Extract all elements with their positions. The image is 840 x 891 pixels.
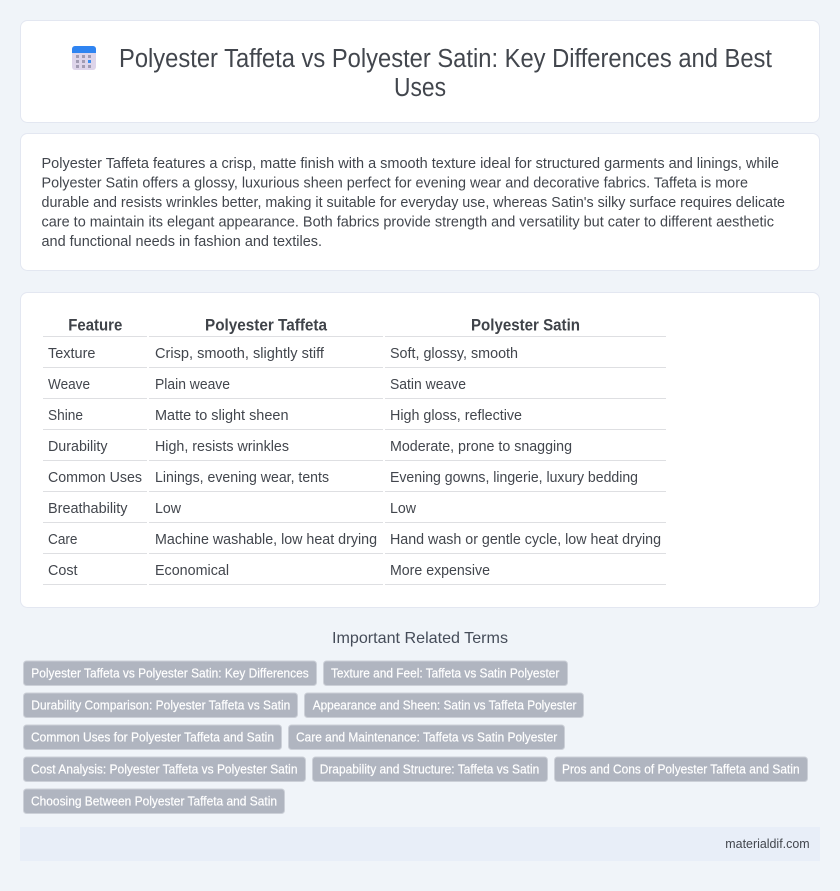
row: breathability: Low xyxy=(390,501,417,517)
row: weave: Satin weave xyxy=(390,377,466,393)
text block: overview: Polyester Taffeta features a crisp, matte finish with a smooth texture ideal for structured garments and linings, while xyxy=(42,156,779,172)
row: cost: More expensive xyxy=(390,563,490,579)
tag xyxy=(24,661,316,686)
tag: Care and Maintenance: Taffeta vs Satin Polyester xyxy=(296,730,557,744)
row: breathability xyxy=(48,501,417,517)
tag xyxy=(24,693,298,718)
title: Polyester Taffeta vs Polyester Satin: Key Differences and Best xyxy=(119,45,772,73)
footer: site name: materialdif.com xyxy=(725,836,810,851)
row: durability: Moderate, prone to snagging xyxy=(390,439,572,455)
row: care: Care xyxy=(48,532,78,548)
row: cost xyxy=(48,563,490,579)
row: care: Machine washable, low heat drying xyxy=(155,532,377,548)
row: shine: Shine xyxy=(48,408,83,424)
row: cost: Economical xyxy=(155,563,229,579)
text block: overview xyxy=(42,156,785,250)
title xyxy=(119,45,772,102)
tag xyxy=(24,789,284,814)
tag xyxy=(324,661,568,686)
row: shine xyxy=(48,408,522,424)
tags: related terms xyxy=(24,661,808,814)
tag xyxy=(312,757,548,782)
row: common uses: Linings, evening wear, tents xyxy=(155,470,329,486)
row: common uses: Common Uses xyxy=(48,470,142,486)
tag xyxy=(304,693,584,718)
tag: Texture and Feel: Taffeta vs Satin Polyester xyxy=(331,666,559,680)
table header xyxy=(68,316,580,334)
tag: Pros and Cons of Polyester Taffeta and Satin xyxy=(562,762,800,776)
row: breathability: Breathability xyxy=(48,501,128,517)
text block: overview: durable and resists wrinkles better, making it suitable for everyday use, whereas Satin's silky surface requires delicate xyxy=(42,195,785,211)
row: durability xyxy=(48,439,572,455)
icon: calendar xyxy=(72,46,96,70)
row: shine: Matte to slight sheen xyxy=(155,408,288,424)
tag: Polyester Taffeta vs Polyester Satin: Key Differences xyxy=(31,666,309,680)
tag: Choosing Between Polyester Taffeta and Satin xyxy=(31,794,277,808)
tag xyxy=(24,725,282,750)
table header: Polyester Satin xyxy=(471,316,580,334)
panel: comparison table xyxy=(20,292,820,608)
row: shine: High gloss, reflective xyxy=(390,408,522,424)
text block: overview: Polyester Satin offers a glossy, luxurious sheen perfect for evening wear and decorative fabrics. Taffeta is more xyxy=(42,176,748,192)
tag: Appearance and Sheen: Satin vs Taffeta Polyester xyxy=(313,698,576,712)
row: cost: Cost xyxy=(48,563,78,579)
tag: Drapability and Structure: Taffeta vs Satin xyxy=(320,762,539,776)
row: texture: Soft, glossy, smooth xyxy=(390,346,518,362)
table header: Polyester Taffeta xyxy=(205,316,328,334)
table header: Feature xyxy=(68,316,122,334)
heading: important related terms: Important Related Terms xyxy=(332,630,508,647)
tag: Durability Comparison: Polyester Taffeta vs Satin xyxy=(31,698,290,712)
row: texture: Crisp, smooth, slightly stiff xyxy=(155,346,325,362)
row: weave xyxy=(48,377,466,393)
row: weave: Weave xyxy=(48,377,90,393)
row: care: Hand wash or gentle cycle, low heat drying xyxy=(390,532,661,548)
tag: Cost Analysis: Polyester Taffeta vs Polyester Satin xyxy=(31,762,298,776)
text block: overview: and functional needs in fashion and textiles. xyxy=(42,234,322,250)
row: texture xyxy=(48,346,518,362)
tag xyxy=(554,757,808,782)
tag xyxy=(24,757,306,782)
tag xyxy=(288,725,564,750)
row: common uses xyxy=(48,470,638,486)
row: durability: Durability xyxy=(48,439,108,455)
row: common uses: Evening gowns, lingerie, luxury bedding xyxy=(390,470,638,486)
text block: overview: care to maintain its elegant appearance. Both fabrics provide strength and versatility but cater to different aesthetic xyxy=(42,214,774,230)
panel: intro paragraph xyxy=(20,134,820,270)
row: care xyxy=(48,532,661,548)
footer bar xyxy=(20,827,820,861)
tag: Common Uses for Polyester Taffeta and Satin xyxy=(31,730,274,744)
row: weave: Plain weave xyxy=(155,377,230,393)
row: durability: High, resists wrinkles xyxy=(155,439,289,455)
row: breathability: Low xyxy=(155,501,182,517)
panel: title card xyxy=(20,20,820,122)
title: Uses xyxy=(394,74,446,102)
row: texture: Texture xyxy=(48,346,96,362)
